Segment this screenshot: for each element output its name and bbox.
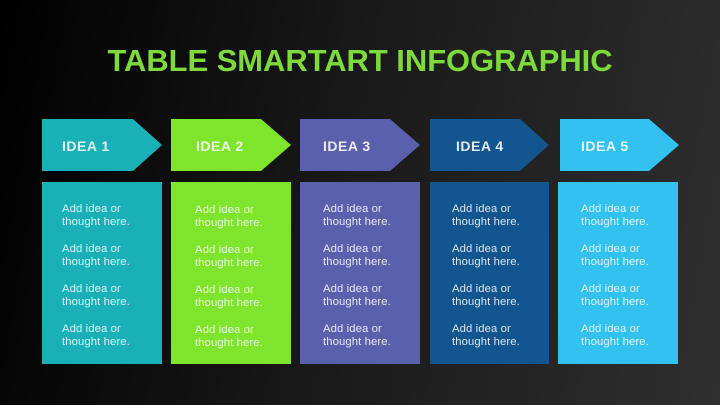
text block: idea 1 items: Add idea or (62, 283, 121, 295)
header arrow: idea 2 (171, 119, 291, 171)
text block: idea 2 items: thought here. (195, 217, 263, 229)
text block: idea 4 items: Add idea or (452, 283, 511, 295)
text block: idea 4 items: Add idea or (452, 243, 511, 255)
text block: idea 2 items: Add idea or (195, 204, 254, 216)
header arrow: idea 5 (560, 119, 679, 171)
text block: idea 5 items (581, 203, 649, 348)
text block: idea 4 items: thought here. (452, 336, 520, 348)
text block: idea 4 items: thought here. (452, 256, 520, 268)
text block: idea 2 items: Add idea or (195, 324, 254, 336)
text block: idea 1 items: Add idea or (62, 243, 121, 255)
text block: idea 1 items: thought here. (62, 336, 130, 348)
text block: idea 5 items: Add idea or (581, 203, 640, 215)
text block: idea 5 items: thought here. (581, 336, 649, 348)
text block: idea 1 items: thought here. (62, 256, 130, 268)
text block: idea 3 items: thought here. (323, 296, 391, 308)
header arrow: idea 5: IDEA 5 (581, 138, 629, 154)
text block: idea 2 items: thought here. (195, 257, 263, 269)
text block: idea 5 items: Add idea or (581, 323, 640, 335)
text block: idea 3 items: Add idea or (323, 283, 382, 295)
text block: idea 4 items (452, 203, 520, 348)
text block: idea 3 items: Add idea or (323, 243, 382, 255)
text block: idea 5 items: thought here. (581, 296, 649, 308)
header arrow: idea 4: IDEA 4 (456, 138, 504, 154)
text block: idea 2 items: Add idea or (195, 244, 254, 256)
text block: idea 3 items: thought here. (323, 336, 391, 348)
text block: idea 5 items: Add idea or (581, 283, 640, 295)
text block: idea 4 items: thought here. (452, 216, 520, 228)
text block: idea 3 items: Add idea or (323, 323, 382, 335)
panel: idea 5 (558, 182, 678, 364)
text block: idea 2 items: thought here. (195, 297, 263, 309)
text block: idea 2 items (195, 204, 263, 349)
panel: idea 1 (42, 182, 162, 364)
text block: idea 1 items: thought here. (62, 216, 130, 228)
text block: idea 5 items: Add idea or (581, 243, 640, 255)
header arrow: idea 3: IDEA 3 (323, 138, 371, 154)
header arrow: idea 4 (430, 119, 549, 171)
title: TABLE SMARTART INFOGRAPHIC (107, 43, 613, 78)
text block: idea 2 items: thought here. (195, 337, 263, 349)
header arrow: idea 2: IDEA 2 (196, 138, 244, 154)
text block: idea 4 items: Add idea or (452, 323, 511, 335)
panel: idea 4 (430, 182, 549, 364)
header arrow: idea 1: IDEA 1 (62, 138, 110, 154)
text block: idea 1 items: Add idea or (62, 203, 121, 215)
text block: idea 3 items (323, 203, 391, 348)
panel: idea 2 (171, 182, 291, 364)
text block: idea 2 items: Add idea or (195, 284, 254, 296)
header arrow: idea 1 (42, 119, 162, 171)
text block: idea 4 items: thought here. (452, 296, 520, 308)
text block: idea 3 items: Add idea or (323, 203, 382, 215)
text block: idea 5 items: thought here. (581, 256, 649, 268)
text block: idea 1 items: thought here. (62, 296, 130, 308)
text block: idea 3 items: thought here. (323, 256, 391, 268)
panel: idea 3 (300, 182, 420, 364)
text block: idea 3 items: thought here. (323, 216, 391, 228)
header arrow: idea 3 (300, 119, 420, 171)
text block: idea 1 items: Add idea or (62, 323, 121, 335)
text block: idea 4 items: Add idea or (452, 203, 511, 215)
text block: idea 1 items (62, 203, 130, 348)
text block: idea 5 items: thought here. (581, 216, 649, 228)
